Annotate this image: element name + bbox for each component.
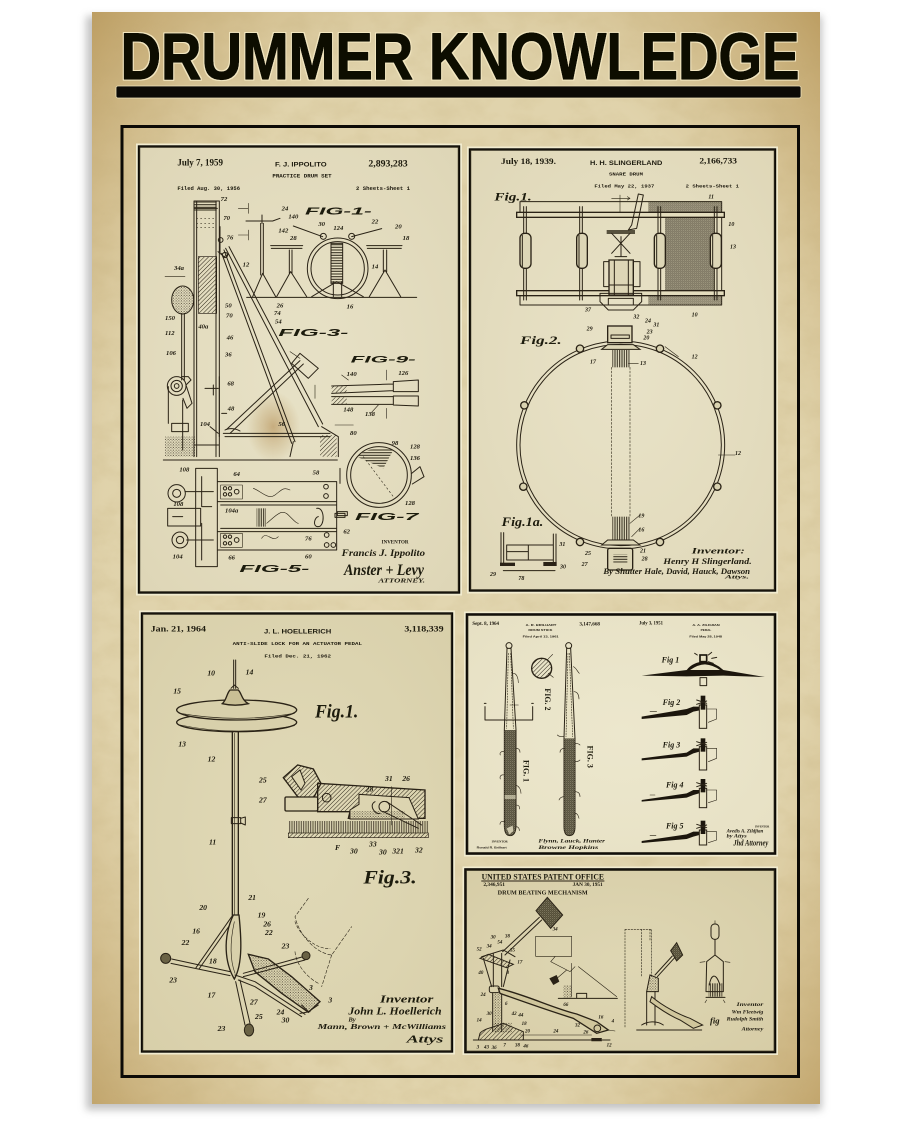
- part reference numbers and figure mark: [476, 928, 720, 1051]
- part reference numbers and figure mark: 40: [477, 971, 484, 976]
- part reference numbers: 56: [278, 421, 286, 428]
- captions for stick figures: [521, 688, 594, 782]
- patent header text: JAN 30, 1951: [573, 883, 603, 888]
- part reference numbers: 76: [305, 536, 312, 543]
- part reference numbers and figure mark: 43: [483, 1045, 489, 1050]
- inventor signature block: Henry H Slingerland.: [662, 557, 752, 566]
- part reference numbers and figure mark: 38: [504, 934, 510, 939]
- part reference numbers: 25: [254, 1012, 263, 1021]
- part reference numbers: 106: [166, 350, 177, 357]
- part reference numbers: 28: [641, 557, 648, 563]
- inventor signature block: [341, 540, 425, 585]
- inventor signature block: Attorney: [741, 1027, 764, 1033]
- patent header text: DRUM STICK: [528, 628, 553, 632]
- patent header text: A. A. ZILDJIAN: [692, 623, 720, 627]
- part reference numbers: 70: [223, 215, 231, 222]
- part reference numbers and figure mark: 18: [522, 1022, 527, 1027]
- panel: snare drum patent: [468, 148, 777, 592]
- part reference numbers: 150: [165, 315, 176, 322]
- patent header text: July 18, 1939.: [501, 157, 556, 166]
- part reference numbers: 17: [590, 359, 597, 365]
- part reference numbers: 31: [558, 542, 565, 548]
- part reference numbers and figure mark: 26: [582, 1030, 589, 1035]
- part reference numbers: 140: [288, 214, 299, 221]
- part reference numbers: 28: [365, 785, 373, 794]
- part reference numbers and figure mark: 54: [497, 940, 503, 945]
- part reference numbers: 16: [347, 303, 354, 310]
- part reference numbers: 128: [405, 500, 416, 507]
- fig 7: drum head: [335, 443, 424, 517]
- patent header text: Filed April 13, 1961: [523, 635, 559, 639]
- inventor signature blocks: Avedis A. Zildjian: [726, 829, 764, 834]
- part reference numbers and figure mark: 20: [524, 1030, 530, 1035]
- poster background: [86, 12, 822, 1110]
- part reference numbers and figure mark: 17: [517, 960, 523, 965]
- cymbal figures 2 to 5: [642, 696, 717, 845]
- figure captions: FIG-9-: [351, 355, 416, 365]
- part reference numbers and figure mark: 52: [477, 948, 482, 953]
- part reference numbers: 25: [258, 775, 267, 784]
- figure captions: Fig.3.: [362, 867, 417, 888]
- inventor signature block: Francis J. Ippolito: [341, 549, 425, 559]
- part reference numbers and figure mark: 8: [507, 971, 510, 976]
- part reference numbers: 40a: [197, 323, 209, 330]
- inventor signature blocks: Jhd Attorney: [733, 838, 768, 848]
- patent header text: ANTI-SLIDE LOCK FOR AN ACTUATOR PEDAL: [233, 641, 362, 647]
- fig 2: stick cross section: [532, 654, 553, 678]
- part reference numbers: [165, 196, 421, 561]
- part reference numbers: 36: [224, 352, 232, 359]
- part reference numbers: 30: [378, 847, 387, 856]
- part reference numbers and figure mark: 16: [598, 1015, 604, 1020]
- part reference numbers: 32: [414, 845, 423, 854]
- inventor signature block: Inventor:: [690, 546, 746, 555]
- inventor signature block: Wm Fleetwig: [732, 1009, 764, 1015]
- figure captions: [314, 702, 417, 888]
- part reference numbers: F: [335, 843, 340, 852]
- part reference numbers: 29: [489, 572, 496, 578]
- inventor signature block: INVENTOR: [382, 540, 409, 545]
- part reference numbers: 23: [168, 975, 177, 984]
- inventor signature block: Attys.: [723, 575, 749, 581]
- part reference numbers: 321: [391, 846, 404, 855]
- part reference numbers: 124: [333, 225, 344, 232]
- patent header text: [501, 156, 739, 190]
- part reference numbers: 37: [584, 308, 592, 314]
- inventor signature blocks: Browne Hopkins: [537, 845, 600, 851]
- inventor signature blocks: [477, 826, 769, 851]
- part reference numbers: 58: [313, 469, 320, 476]
- patent header text: J. L. HOELLERICH: [264, 628, 332, 635]
- part reference numbers: 19: [638, 513, 644, 519]
- inventor signature block: Anster + Levy: [343, 562, 424, 579]
- part reference numbers: 70: [226, 312, 233, 319]
- fig 9: drumsticks detail: [332, 370, 418, 418]
- part reference numbers: 140: [347, 371, 357, 378]
- inventor signature block: Rudolph Smith: [726, 1017, 763, 1023]
- patent header text: Filed Dec. 21, 1962: [264, 654, 331, 660]
- figure captions: Fig.1.: [314, 702, 358, 723]
- inventor signature block: [316, 994, 446, 1045]
- part reference numbers: 14: [372, 263, 379, 270]
- part reference numbers: 33: [368, 840, 377, 849]
- cymbal figure 1: [642, 652, 765, 686]
- part reference numbers: 30: [317, 221, 326, 228]
- fig 1: tripod base and pedal: [161, 898, 352, 1036]
- part reference numbers: 60: [305, 554, 312, 561]
- patent header text: July 3, 1951: [639, 621, 663, 626]
- part reference numbers: 74: [274, 310, 281, 317]
- patent header text: [482, 872, 604, 897]
- part reference numbers: 27: [581, 562, 589, 568]
- part reference numbers: 23: [281, 941, 289, 950]
- part reference numbers: 76: [227, 234, 234, 241]
- fig 1: hi-hat stand: [177, 660, 297, 917]
- patent header text: [472, 621, 722, 639]
- part reference numbers: 20: [642, 335, 649, 341]
- part reference numbers: 23: [646, 329, 653, 335]
- part reference numbers: 10: [692, 313, 698, 319]
- figure captions: FIG-7: [355, 512, 419, 523]
- part reference numbers: 11: [209, 837, 216, 846]
- title underline bar: [116, 86, 801, 98]
- patent header text: [177, 158, 411, 192]
- part reference numbers: 16: [638, 528, 644, 534]
- part reference numbers: 142: [278, 228, 289, 235]
- part reference numbers: 18: [403, 235, 410, 242]
- front view beater assembly: [700, 921, 730, 1003]
- side view pedal: [625, 929, 703, 1030]
- part reference numbers: 148: [343, 407, 354, 414]
- part reference numbers: 12: [243, 262, 250, 269]
- part reference numbers: 31: [384, 774, 393, 783]
- part reference numbers: 23: [217, 1024, 225, 1033]
- fig 1a: strainer detail: [500, 533, 557, 571]
- inventor signature block: By Shutter Hale, David, Hauck, Dawson: [602, 566, 750, 576]
- patent header text: F. J. IPPOLITO: [275, 162, 327, 169]
- part reference numbers: 30: [559, 564, 566, 570]
- inventor signature block: Attys: [405, 1034, 444, 1045]
- part reference numbers: 11: [708, 194, 714, 200]
- fig 3: practice pedal frame: [163, 201, 353, 462]
- part reference numbers: 21: [639, 549, 646, 555]
- part reference numbers and figure mark: 24: [552, 1030, 559, 1035]
- part reference numbers and figure mark: 4: [611, 1019, 615, 1024]
- part reference numbers: 30: [281, 1015, 289, 1024]
- part reference numbers and figure mark: 3: [476, 1045, 480, 1050]
- part reference numbers: 12: [692, 354, 698, 360]
- part reference numbers: 31: [652, 323, 659, 329]
- part reference numbers: 22: [371, 218, 379, 225]
- patent header text: 2 Sheets-Sheet 1: [356, 185, 411, 192]
- cymbal figure captions: Fig 4: [666, 781, 684, 790]
- part reference numbers: 138: [365, 411, 376, 418]
- fig 1: drum set: [246, 215, 417, 299]
- part reference numbers: 50: [225, 302, 232, 309]
- part reference numbers: 22: [181, 938, 189, 947]
- patent header text: 2,166,733: [699, 156, 738, 166]
- part reference numbers: 13: [178, 740, 186, 749]
- part reference numbers: 54: [275, 318, 282, 325]
- inventor signature blocks: Ronald R. Brilhart: [477, 845, 507, 849]
- part reference numbers: 3: [308, 983, 313, 992]
- fig 3: anti-slide lock section: [283, 765, 428, 838]
- part reference numbers and figure mark: 7: [503, 1044, 506, 1049]
- part reference numbers: 18: [209, 956, 217, 965]
- patent header text: SNARE DRUM: [609, 172, 643, 178]
- part reference numbers: 104: [200, 421, 211, 428]
- part reference numbers: 10: [207, 669, 215, 678]
- part reference numbers: 24: [281, 206, 289, 213]
- fig 2: snare drum top view: [517, 326, 735, 570]
- part reference numbers and figure mark: 44: [517, 1014, 524, 1019]
- part reference numbers: 34a: [173, 265, 185, 272]
- inventor signature block: [726, 1002, 764, 1033]
- patent header text: July 7, 1959: [177, 158, 223, 168]
- part reference numbers: 27: [258, 795, 268, 804]
- part reference numbers and figure mark: 55: [510, 949, 515, 954]
- patent header text: PRACTICE DRUM SET: [272, 173, 332, 180]
- part reference numbers: 68: [227, 380, 235, 387]
- patent header text: DRUM BEATING MECHANISM: [498, 890, 588, 897]
- fig 5: pedal plan view: [168, 468, 347, 567]
- part reference numbers: 24: [644, 319, 651, 325]
- part reference numbers and figure mark: 66: [563, 1003, 569, 1008]
- part reference numbers: 104a: [225, 508, 239, 515]
- inventor signature blocks: Flynn, Lauck, Hunter: [538, 838, 606, 844]
- inventor signature block: ATTORNEY.: [377, 578, 425, 585]
- part reference numbers: 26: [262, 920, 271, 929]
- patent header text: 3,147,668: [579, 623, 601, 628]
- part reference numbers and figure mark: 24: [480, 993, 486, 998]
- patent header text: 2,893,283: [368, 160, 408, 170]
- part reference numbers and figure mark: 46: [522, 1044, 529, 1049]
- part reference numbers: 16: [192, 926, 200, 935]
- inventor signature block: By: [347, 1017, 356, 1024]
- part reference numbers: 3: [327, 995, 332, 1004]
- inventor signature blocks: by Attys: [727, 835, 747, 840]
- cymbal figure captions: Fig 1: [662, 655, 679, 664]
- figure captions: Fig.1.: [493, 190, 532, 204]
- patent header text: [151, 623, 444, 660]
- part reference numbers: 20: [198, 903, 207, 912]
- part reference numbers: 48: [227, 406, 235, 413]
- part reference numbers: 15: [173, 686, 181, 695]
- part reference numbers: 72: [221, 196, 228, 203]
- part reference numbers: 26: [276, 303, 284, 310]
- part reference numbers: 64: [233, 471, 241, 478]
- patent header text: Filed May 22, 1937: [594, 184, 654, 190]
- part reference numbers: 108: [179, 467, 190, 474]
- panel: hi-hat patent: [140, 612, 454, 1054]
- part reference numbers: 26: [401, 774, 410, 783]
- cymbal figure captions: Fig 2: [663, 698, 680, 707]
- patent header text: Filed Aug. 30, 1956: [177, 185, 241, 192]
- inventor signature blocks: INVENTOR: [755, 826, 769, 829]
- panel: drum beating mechanism patent: [464, 868, 777, 1054]
- title: DRUMMER KNOWLEDGE: [120, 19, 800, 93]
- part reference numbers and figure mark: 34: [552, 928, 558, 933]
- patent header text: PEDAL: [701, 628, 712, 632]
- main bass drum pedal: [473, 897, 615, 1041]
- part reference numbers: 25: [584, 551, 591, 557]
- part reference numbers and figure mark: 30: [486, 1012, 492, 1017]
- part reference numbers: 98: [392, 440, 399, 447]
- patent header text: 2 Sheets-Sheet 1: [686, 184, 739, 190]
- panel: drum stick and cymbal patents: [465, 612, 777, 856]
- part reference numbers: 14: [246, 667, 253, 676]
- figure captions: FIG-5-: [239, 564, 311, 575]
- inventor signature blocks: INVENTOR: [492, 839, 509, 843]
- part reference numbers and figure mark: 6: [505, 1002, 508, 1007]
- part reference numbers: 108: [173, 501, 184, 508]
- patent header text: Filed May 28, 1948: [689, 635, 722, 639]
- cymbal figure captions: Fig 3: [663, 741, 680, 750]
- fig 1: snare drum side view: [517, 194, 724, 310]
- part reference numbers: 21: [247, 893, 256, 902]
- part reference numbers: 46: [226, 334, 234, 341]
- inventor signature block: Inventor: [378, 994, 433, 1005]
- part reference numbers and figure mark: 30: [490, 935, 496, 940]
- figure captions: Fig.2.: [518, 335, 562, 347]
- part reference numbers: 30: [349, 846, 358, 855]
- captions for stick figures: FIG. 2: [543, 688, 552, 711]
- part reference numbers: [168, 667, 423, 1033]
- part reference numbers and figure mark: 14: [477, 1019, 482, 1024]
- part reference numbers: 13: [640, 361, 646, 367]
- part reference numbers and figure mark: 12: [607, 1044, 612, 1049]
- patent header text: H. H. SLINGERLAND: [590, 161, 663, 167]
- figure captions: FIG-3-: [278, 328, 350, 339]
- part reference numbers: 66: [228, 554, 236, 561]
- part reference numbers: 22: [264, 928, 273, 937]
- figure captions: Fig.1a.: [501, 515, 543, 529]
- part reference numbers and figure mark: 32: [574, 1024, 580, 1029]
- patent header text: 3,118,339: [404, 623, 444, 633]
- part reference numbers and figure mark: fig: [710, 1015, 720, 1025]
- outer frame: [122, 126, 798, 1076]
- panel: practice drum set patent: [137, 144, 461, 594]
- part reference numbers: 12: [735, 451, 741, 457]
- inventor signature block: John L. Hoellerich: [347, 1006, 442, 1017]
- figure captions: [239, 207, 419, 575]
- captions for stick figures: FIG. 1: [521, 760, 530, 782]
- stick reference leaders: [500, 667, 580, 831]
- part reference numbers: 136: [410, 455, 421, 462]
- part reference numbers: 28: [289, 235, 297, 242]
- part reference numbers: 13: [730, 244, 736, 250]
- part reference numbers: 29: [586, 327, 593, 333]
- patent header text: A. R. BRILHART: [526, 623, 557, 627]
- patent header text: Jan. 21, 1964: [151, 623, 207, 633]
- part reference numbers and figure mark: 36: [491, 1046, 497, 1051]
- part reference numbers: 12: [208, 755, 215, 764]
- figure captions: [493, 190, 562, 529]
- part reference numbers: 24: [276, 1007, 284, 1016]
- inventor signature block: Inventor: [735, 1002, 764, 1008]
- small pedal detail: [536, 936, 617, 998]
- part reference numbers: 62: [343, 528, 351, 535]
- part reference numbers and figure mark: 34: [486, 944, 492, 949]
- fig 3: drum stick: [564, 643, 575, 836]
- part reference numbers: 20: [394, 223, 402, 230]
- part reference numbers: 104: [173, 554, 183, 561]
- part reference numbers and figure mark: 42: [511, 1012, 517, 1017]
- inventor signature block: Mann, Brown + McWilliams: [316, 1022, 446, 1031]
- cymbal figure captions: Fig 5: [666, 821, 684, 830]
- inventor signature block: [602, 546, 752, 581]
- part reference numbers: 126: [398, 370, 409, 377]
- part reference numbers: 78: [518, 576, 524, 582]
- cymbal figure captions: [662, 655, 684, 830]
- patent header text: UNITED STATES PATENT OFFICE: [482, 872, 604, 881]
- part reference numbers and figure mark: 38: [514, 1044, 520, 1049]
- part reference numbers: 27: [249, 997, 259, 1006]
- part reference numbers: 128: [410, 443, 421, 450]
- patent header text: Sept. 8, 1964: [472, 622, 499, 627]
- figure captions: FIG-1-: [305, 207, 373, 218]
- fig 1: drum stick: [484, 643, 533, 836]
- part reference numbers: [489, 194, 741, 582]
- part reference numbers: 17: [208, 991, 216, 1000]
- part reference numbers: 19: [258, 911, 265, 920]
- part reference numbers: 32: [632, 314, 639, 320]
- part reference numbers: 10: [728, 222, 734, 228]
- patent header text: 2,346,951: [483, 883, 506, 888]
- captions for stick figures: FIG. 3: [585, 746, 594, 768]
- part reference numbers: 80: [350, 430, 357, 437]
- part reference numbers: 112: [165, 330, 175, 337]
